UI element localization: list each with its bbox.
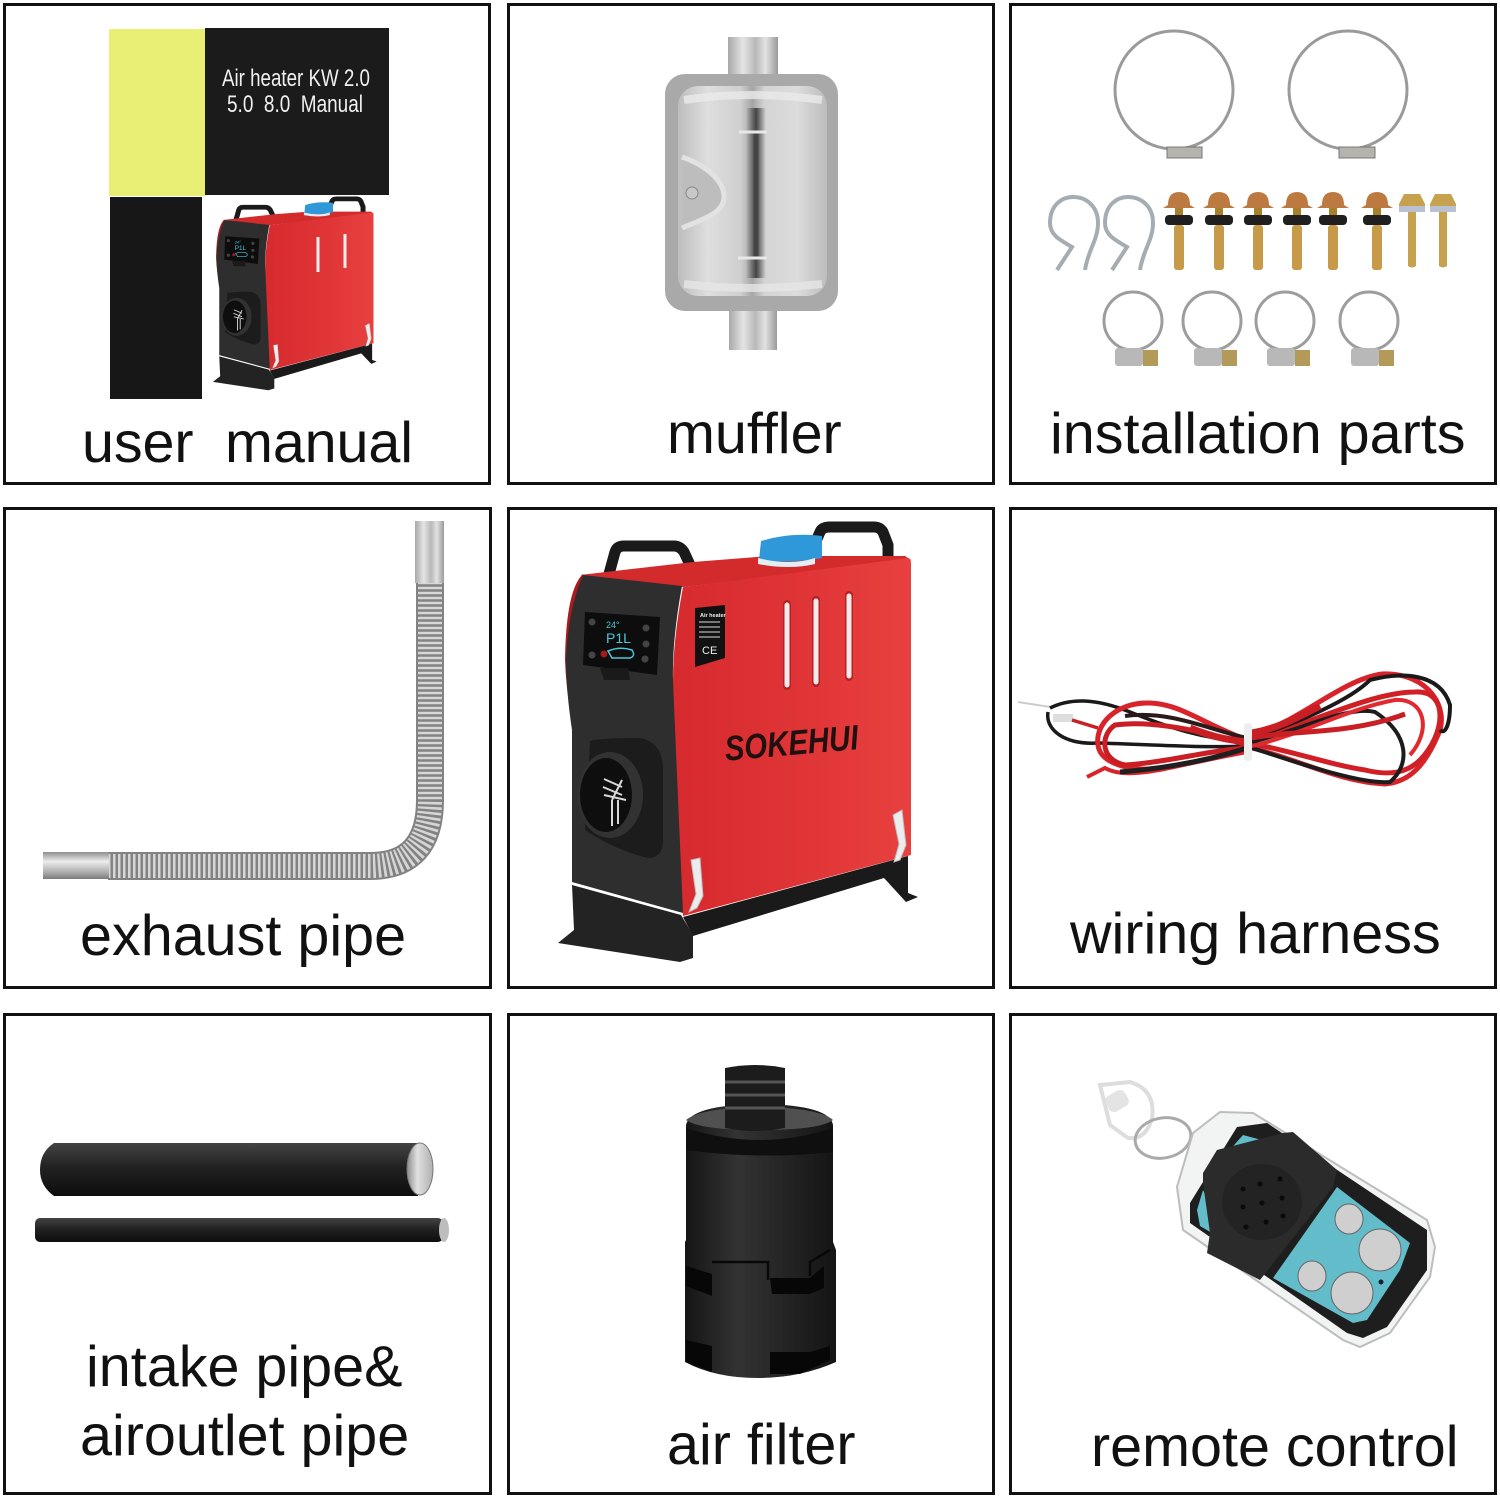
spec label: CE [702,645,717,657]
panel: heater [508,508,994,988]
label: wiring harness [1069,902,1441,966]
spec label: Air heater [700,613,727,619]
vents [787,595,849,686]
panel: muffler [508,4,994,484]
latches [689,858,703,912]
spec label [695,605,727,667]
label: air filter [667,1413,856,1477]
label: exhaust pipe [80,904,406,968]
panel: remote control [1010,1014,1496,1494]
muffler image [665,37,838,350]
air outlet [585,738,663,858]
label: user manual [82,411,413,475]
panel: intake pipes [4,1014,490,1494]
panel: wiring harness [1010,508,1496,988]
label: intake pipe& [86,1335,402,1399]
large intake pipe [40,1143,433,1196]
label: installation parts [1050,402,1466,466]
self tapping screws [1163,192,1456,270]
panel: user manual [4,4,490,484]
corrugated pipe [43,521,444,879]
label: airoutlet pipe [80,1404,409,1468]
control panel [583,612,660,675]
manual booklet: 5.0 8.0 Manual [227,91,363,118]
label: muffler [667,402,842,466]
manual booklet: Air heater KW 2.0 [222,65,370,92]
panel: installation parts [1010,4,1496,484]
large hose clamps [1115,31,1407,158]
manual booklet [109,28,389,399]
label: remote control [1091,1415,1459,1479]
P clips [1050,197,1153,270]
remote [1100,1082,1435,1347]
panel: air filter [508,1014,994,1494]
wires [1018,674,1450,784]
heater shell: P1L [606,630,631,646]
small heater image [213,199,377,390]
heater shell: 24° [606,620,620,630]
heater shell [558,527,918,962]
small outlet pipe [35,1218,449,1242]
small hose clamps [1104,292,1398,366]
brand name: SOKEHUI [723,718,861,769]
label [80,1335,409,1468]
panel: exhaust pipe [4,508,490,988]
filter [685,1065,836,1378]
